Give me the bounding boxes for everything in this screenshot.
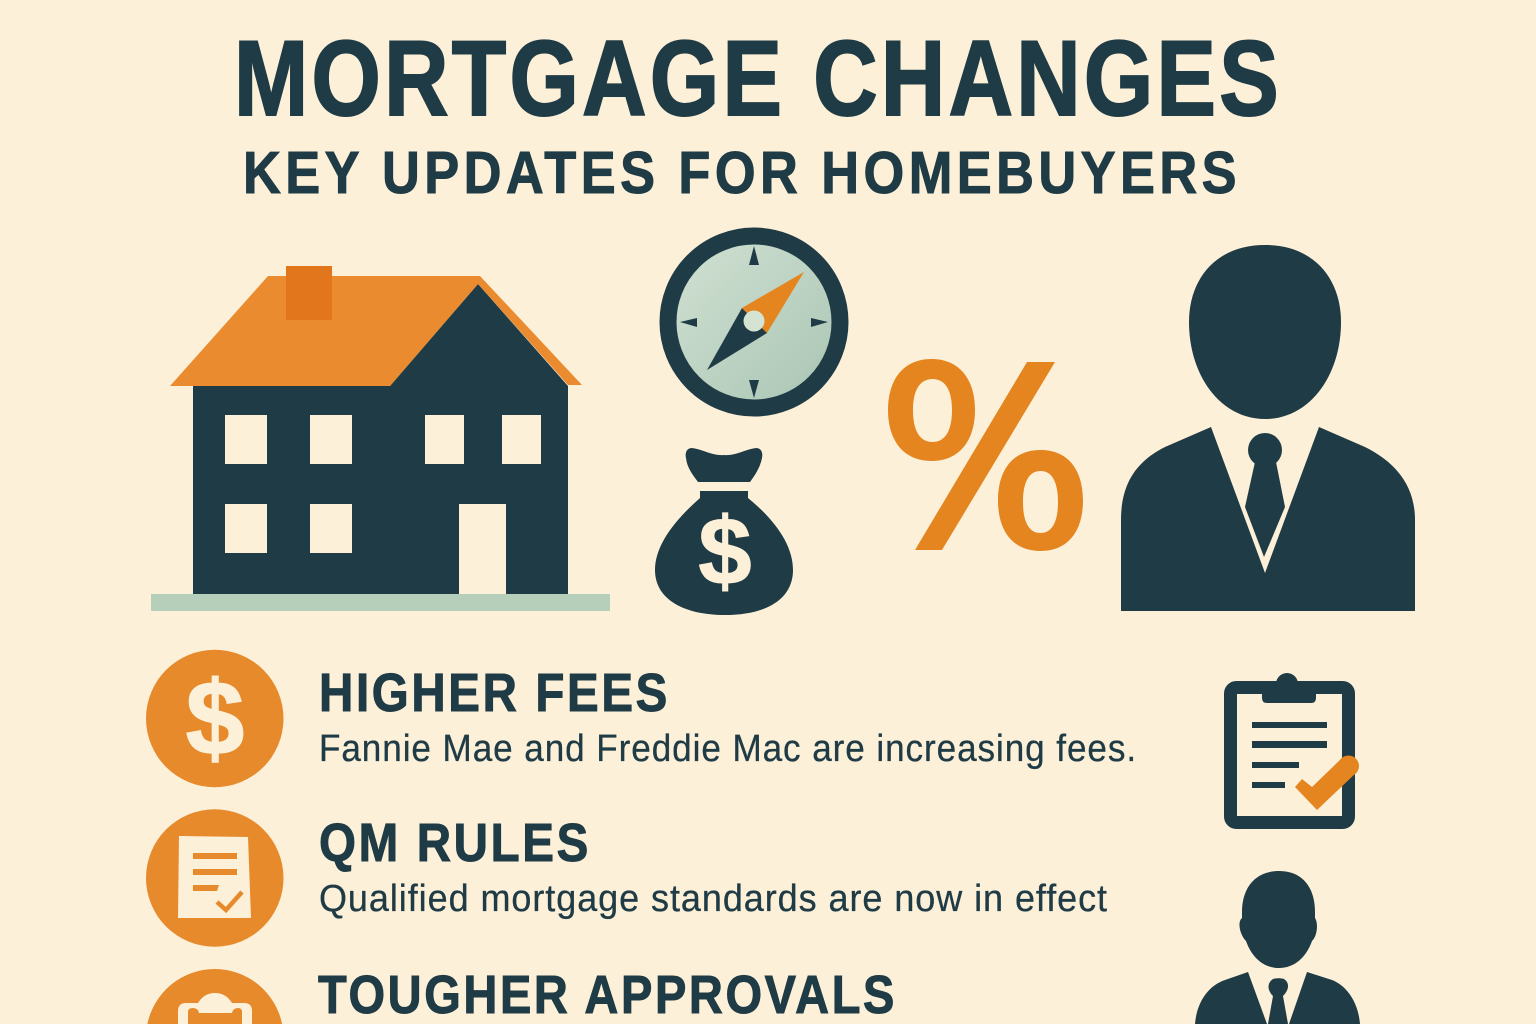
text: qm rules description: Qualified mortgage standards are now in effect bbox=[319, 878, 1108, 920]
icon: dollar circle: $ bbox=[186, 660, 244, 777]
icon: clipboard checklist bbox=[1230, 673, 1359, 822]
icon: dollar circle bbox=[146, 650, 284, 787]
icon: businessman small bbox=[1195, 871, 1360, 1024]
icon: businessman large bbox=[1121, 245, 1415, 611]
icon: percent sign bbox=[888, 359, 1083, 551]
icon: compass bbox=[668, 236, 840, 408]
icon: money bag: $ bbox=[698, 498, 752, 605]
icon: house bbox=[151, 266, 610, 611]
icon: money bag bbox=[655, 448, 793, 615]
heading: higher fees: HIGHER FEES bbox=[319, 663, 670, 723]
subtitle: KEY UPDATES FOR HOMEBUYERS bbox=[243, 140, 1241, 206]
icon: document circle bbox=[146, 809, 284, 947]
text: higher fees description: Fannie Mae and Freddie Mac are increasing fees. bbox=[319, 728, 1137, 770]
heading: tougher approvals: TOUGHER APPROVALS bbox=[318, 965, 897, 1024]
icon: clipboard circle bbox=[147, 969, 282, 1024]
title: MORTGAGE CHANGES bbox=[234, 18, 1282, 138]
heading: qm rules: QM RULES bbox=[319, 813, 591, 873]
